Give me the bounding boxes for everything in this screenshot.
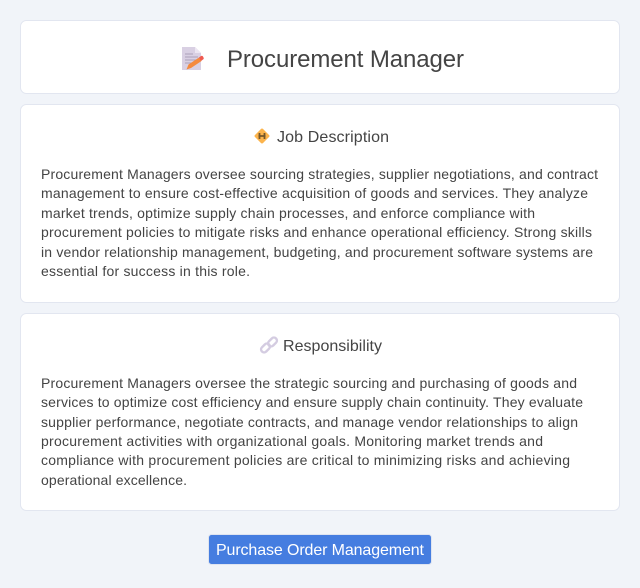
text block: job description: procurement policies to mitigate risks and enhance operational efficiency. Strong skills	[41, 224, 592, 240]
text block: job description: in vendor relationship management, budgeting, and procurement software systems are	[41, 244, 593, 260]
text block: responsibility: supplier performance, negotiate contracts, and manage vendor relationships to align	[41, 414, 578, 430]
text block: responsibility	[41, 375, 583, 488]
text block: job description: Procurement Managers oversee sourcing strategies, supplier negotiations, and contract	[41, 166, 598, 182]
heading: job description: Job Description	[277, 129, 389, 146]
text block: responsibility: services to optimize cost efficiency and ensure supply chain continuity. They evaluate	[41, 394, 583, 410]
panel: responsibility	[20, 314, 620, 510]
icon: construction diamond	[254, 128, 270, 144]
panel: title card	[20, 20, 620, 94]
text block: job description: management to ensure cost-effective acquisition of goods and services. They analyze	[41, 185, 588, 201]
button: purchase order management	[208, 534, 432, 564]
panel: job description	[20, 104, 620, 302]
text block: responsibility: compliance with procurement policies are critical to minimizing risks and achieving	[41, 452, 570, 468]
text block: responsibility: procurement activities with organizational goals. Monitoring market trends and	[41, 433, 543, 449]
text block: responsibility: operational excellence.	[41, 472, 187, 488]
text block: job description: market trends, optimize supply chain processes, and enforce compliance with	[41, 205, 535, 221]
icon: document with pencil	[182, 47, 204, 70]
button: purchase order management: Purchase Order Management	[216, 542, 425, 559]
text block: job description	[41, 166, 598, 279]
text block: responsibility: Procurement Managers oversee the strategic sourcing and purchasing of goods and	[41, 375, 577, 391]
title: Procurement Manager	[227, 46, 464, 73]
heading: responsibility: Responsibility	[283, 338, 382, 355]
icon: chain link	[260, 336, 278, 354]
text block: job description: essential for success in this role.	[41, 263, 250, 279]
